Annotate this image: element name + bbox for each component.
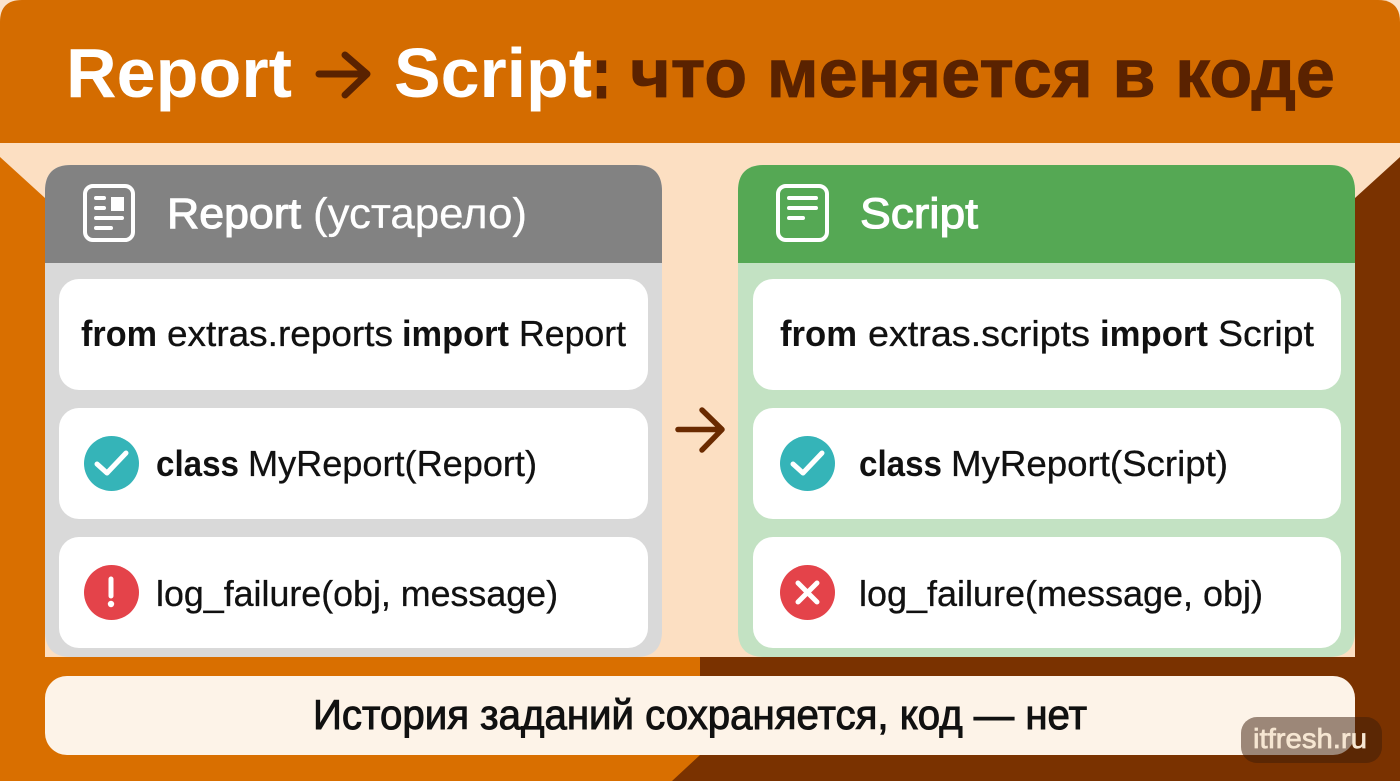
- panel heading: Report: [167, 190, 527, 238]
- panel header: Report: [45, 165, 662, 263]
- title text: Report: Report: [66, 34, 292, 112]
- row: import Report: from: [81, 313, 157, 354]
- row: import Script: Script: [1218, 313, 1314, 354]
- row: import Report: extras.reports: [167, 313, 393, 354]
- icon: warning: [84, 565, 139, 620]
- row: log_failure new: [753, 537, 1341, 648]
- row: import Script: import: [1100, 313, 1208, 354]
- code: log_failure(message, obj): log_failure(message, obj): [859, 573, 1263, 614]
- panel heading: Script: Script: [860, 190, 978, 238]
- row: import Script: extras.scripts: [868, 313, 1090, 354]
- row: import Report: Report: [519, 313, 626, 354]
- bottom note text: История заданий сохраняется, код — нет: [313, 691, 1087, 738]
- title text: dark part: что меняется в коде: [630, 35, 1335, 112]
- title arrow: [319, 55, 367, 95]
- row: log_failure old: [59, 537, 648, 648]
- title banner: [0, 0, 1400, 143]
- icon: cross: [780, 565, 835, 620]
- arrow between panels: [678, 410, 722, 450]
- code: log_failure(obj, message): log_failure(obj, message): [156, 573, 558, 614]
- row: class Script: [753, 408, 1341, 519]
- code: class MyReport(Script): MyReport(Script): [951, 443, 1228, 484]
- row: import Report: import: [402, 313, 509, 354]
- panel: Report: [45, 165, 662, 657]
- panel heading: Report: (устарело): [313, 190, 527, 238]
- code: class MyReport(Script): class: [859, 443, 942, 484]
- row: import Script: from: [780, 313, 857, 354]
- row: import Report: [59, 279, 648, 390]
- bottom note bar: [45, 676, 1355, 755]
- panel: Script: [738, 165, 1355, 657]
- title text: Script: Script: [394, 34, 592, 112]
- panel heading: Report: Report: [167, 190, 301, 238]
- watermark badge: [1241, 717, 1382, 763]
- code: class MyReport(Report): class: [156, 443, 239, 484]
- row: class Report: [59, 408, 648, 519]
- watermark badge: itfresh.ru: [1253, 723, 1367, 754]
- code: class MyReport(Report): MyReport(Report): [248, 443, 537, 484]
- panel header: Script: [738, 165, 1355, 263]
- icon: report document: [85, 186, 133, 240]
- icon: check: [780, 436, 835, 491]
- row: import Script: [753, 279, 1341, 390]
- title colon: :: [593, 34, 610, 112]
- icon: script document: [778, 186, 827, 240]
- icon: check: [84, 436, 139, 491]
